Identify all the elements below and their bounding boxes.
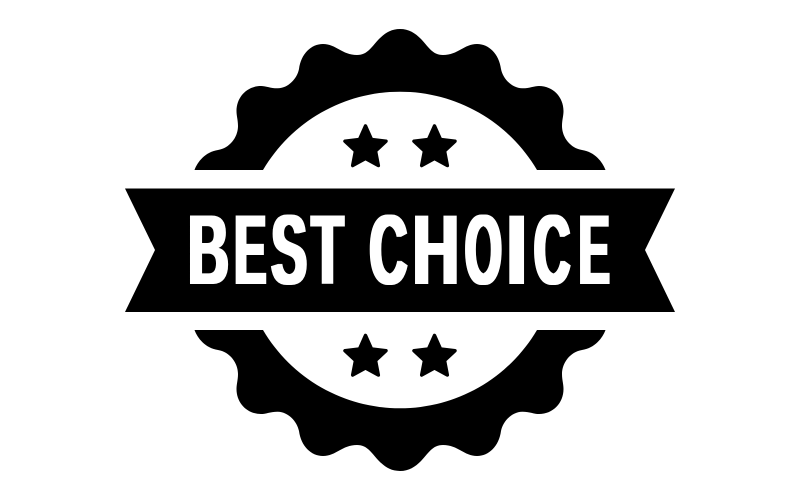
banner text: BEST CHOICE: E	[235, 194, 266, 305]
top stars	[345, 126, 455, 166]
scalloped seal: top half	[194, 29, 606, 170]
banner text: BEST CHOICE: O	[465, 194, 502, 305]
banner text: BEST CHOICE: C	[370, 194, 407, 305]
banner text: BEST CHOICE: I	[506, 194, 527, 305]
banner text: BEST CHOICE: S	[271, 194, 307, 305]
banner text: BEST CHOICE: B	[188, 194, 229, 305]
scalloped seal: bottom half	[194, 330, 606, 471]
badge: best choice: E	[579, 194, 609, 305]
banner text: BEST CHOICE: H	[413, 194, 459, 305]
banner text: BEST CHOICE	[188, 194, 609, 305]
banner text: BEST CHOICE: T	[312, 194, 343, 305]
banner text: BEST CHOICE: C	[534, 194, 570, 305]
bottom stars	[345, 336, 455, 375]
ribbon banner	[125, 188, 675, 312]
